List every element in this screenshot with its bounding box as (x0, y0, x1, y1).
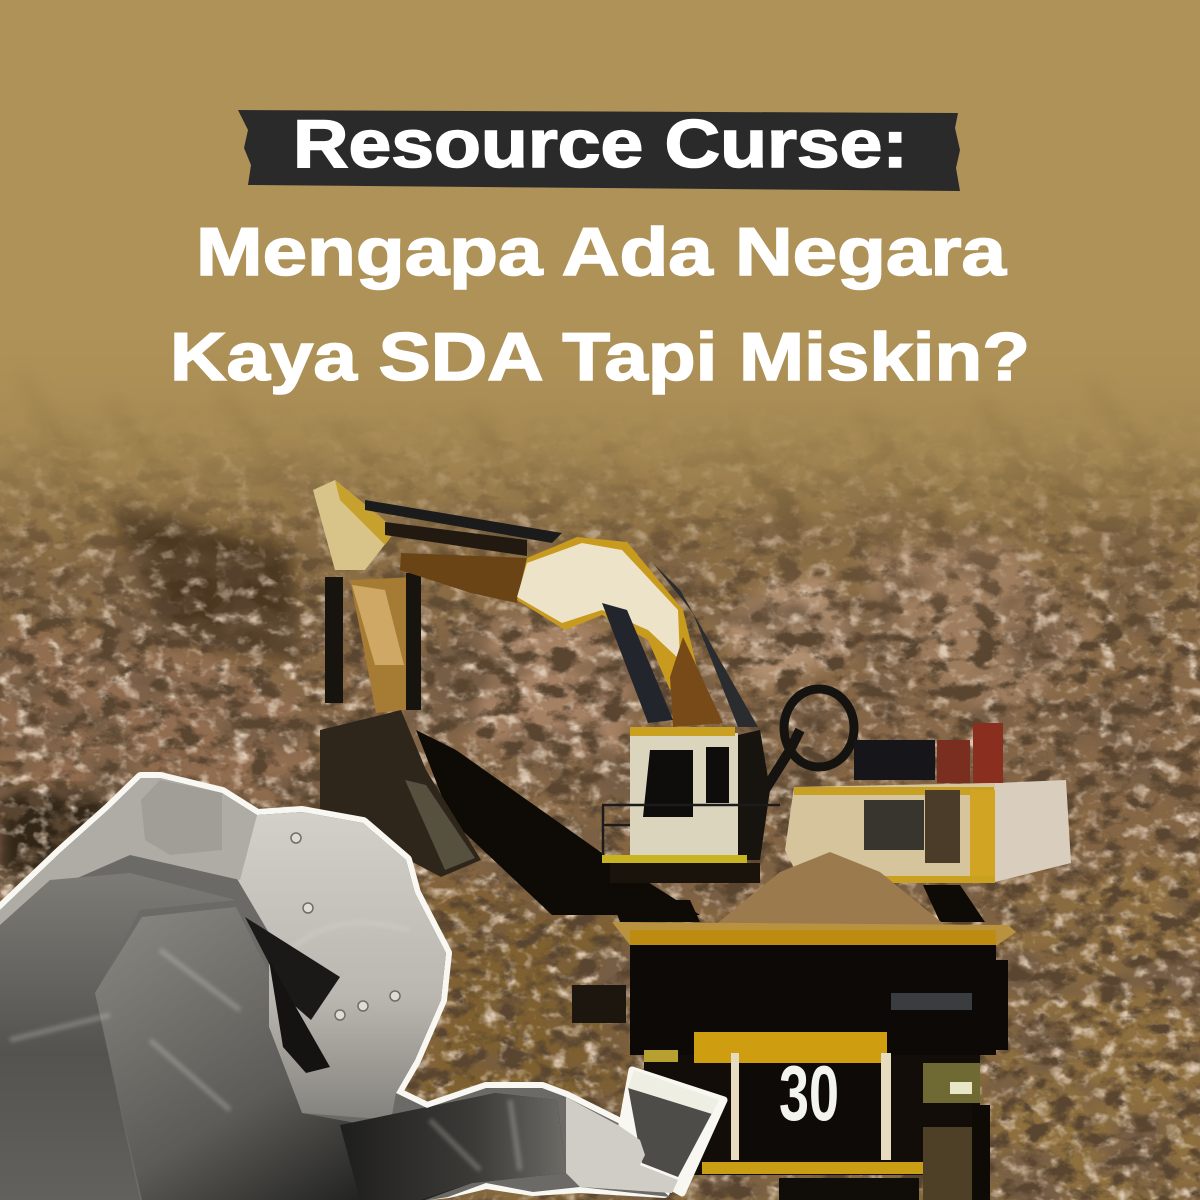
sleeve (95, 907, 566, 1200)
cup (622, 1070, 724, 1193)
title line 3: Kaya SDA Tapi Miskin? (170, 319, 1030, 395)
title line 1: Resource Curse: (293, 106, 908, 182)
hand (566, 1097, 678, 1193)
excavator stick and bucket (313, 480, 481, 877)
white sticker outline (0, 778, 664, 1194)
truck bed (612, 922, 1016, 946)
eyelets (291, 833, 400, 1020)
person: cut-out figure with cup (0, 770, 724, 1200)
folds (10, 923, 520, 1170)
title banner: torn tape (238, 110, 960, 191)
truck wheels (779, 1105, 990, 1200)
truck front with number (644, 1032, 980, 1175)
back panel (0, 873, 236, 1200)
shoulder and yoke (0, 778, 257, 925)
background: mine terrain (0, 385, 1200, 1200)
collar strap (245, 917, 340, 1020)
excavator (313, 480, 1071, 922)
hood (236, 812, 446, 1120)
excavator cab (602, 727, 780, 883)
truck number: 30 (779, 1049, 839, 1137)
excavator boom (365, 500, 854, 790)
truck load (715, 852, 945, 925)
dump truck (572, 852, 1016, 1200)
title line 2: Mengapa Ada Negara (196, 214, 1007, 290)
excavator body (785, 723, 1071, 883)
excavator shadow (416, 730, 700, 915)
title (170, 106, 1030, 395)
hood and jacket (0, 770, 680, 1200)
